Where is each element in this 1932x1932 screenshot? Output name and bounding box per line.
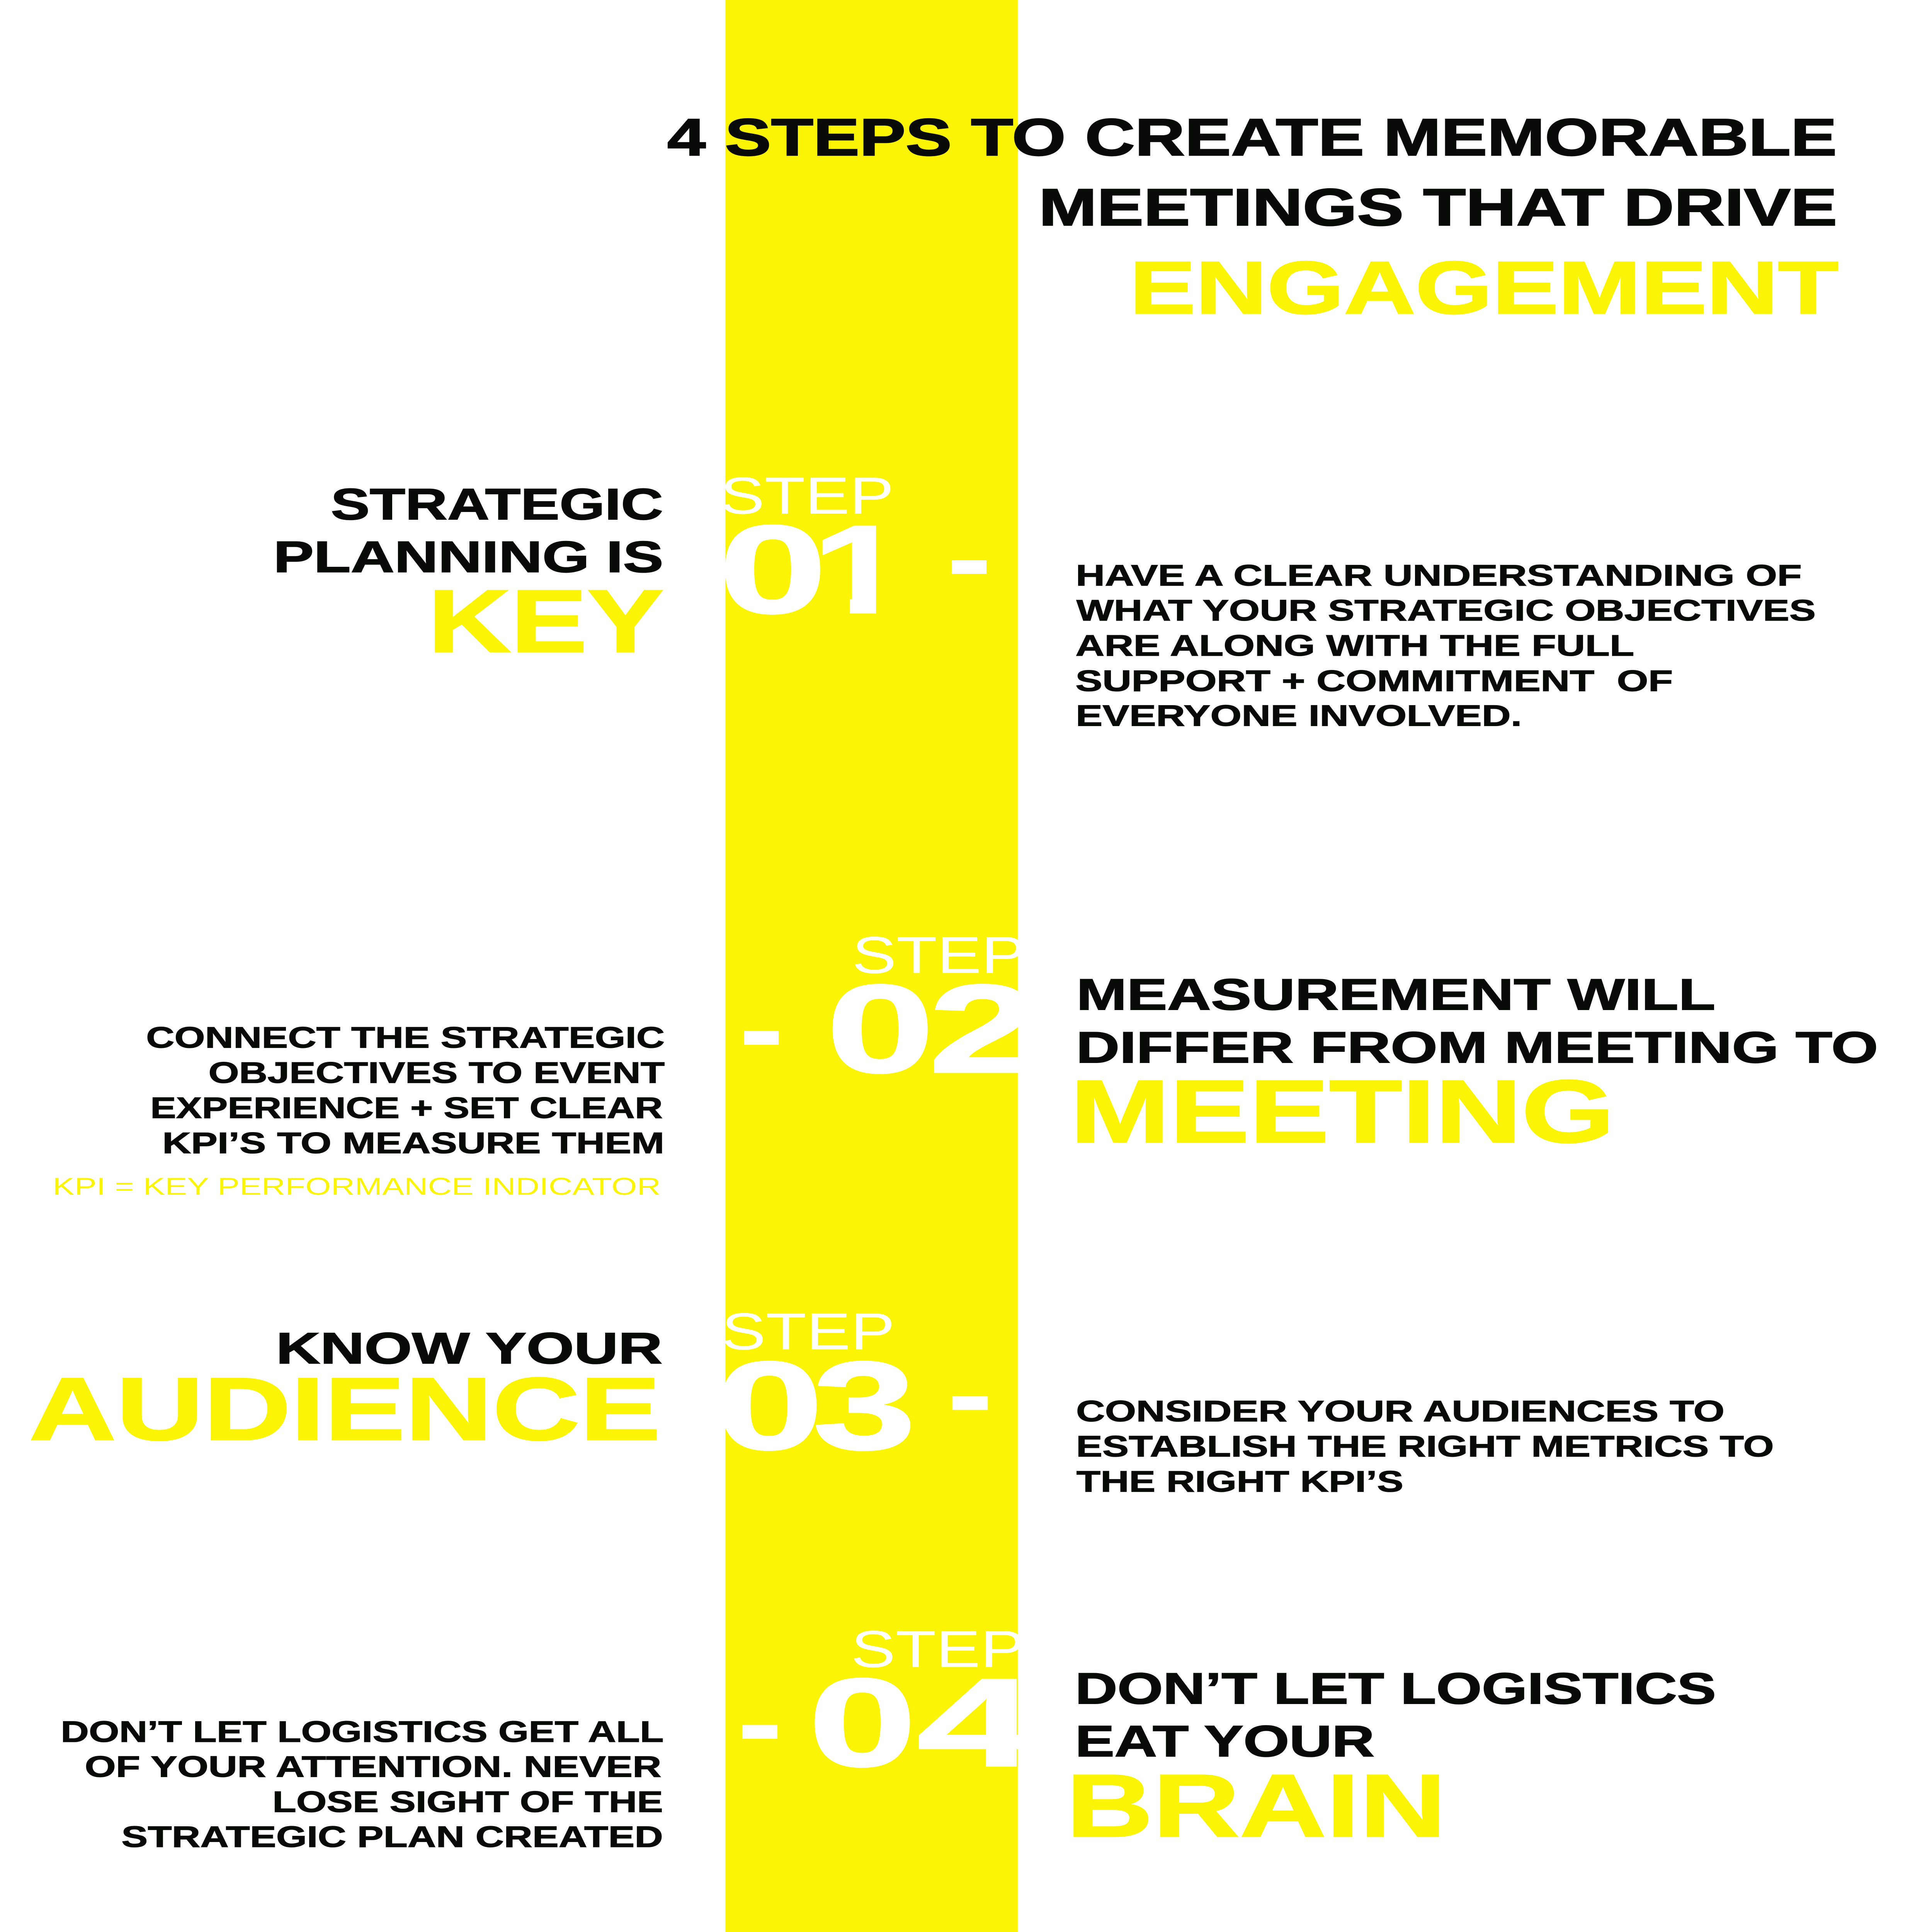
heading line 1: STRATEGIC — [331, 480, 663, 529]
text block: step 2 description: EXPERIENCE + SET CLEAR — [150, 1091, 663, 1124]
text block: step 3 description: CONSIDER YOUR AUDIENCES TO — [1076, 1395, 1725, 1428]
number 04: 4 — [917, 1652, 1037, 1793]
heading line 2: PLANNING IS — [274, 532, 663, 582]
dash — [742, 1725, 777, 1739]
panel: step 2 heading — [1070, 970, 1878, 1161]
text block: step 4 description: STRATEGIC PLAN CREATED — [121, 1820, 663, 1853]
step 4 marker — [742, 1620, 1037, 1793]
text block: step 1 description — [1075, 559, 1816, 732]
step label: STEP — [720, 467, 894, 525]
number 03: 3 — [813, 1335, 916, 1476]
number 02: 2 — [929, 959, 1037, 1099]
text block: step 3 description: ESTABLISH THE RIGHT METRICS TO — [1076, 1429, 1774, 1463]
number 04: 0 — [808, 1652, 917, 1793]
text block: step 1 description: HAVE A CLEAR UNDERSTANDING OF — [1076, 559, 1802, 592]
highlight word: BRAIN — [1066, 1756, 1446, 1855]
dash — [952, 1396, 988, 1410]
step 3 marker — [715, 1303, 988, 1476]
text block: step 1 description: WHAT YOUR STRATEGIC OBJECTIVES — [1077, 594, 1816, 627]
step label: STEP — [852, 926, 1026, 985]
number 03: 0 — [715, 1335, 823, 1476]
panel: step 4 heading — [1066, 1664, 1716, 1855]
heading line 1: MEASUREMENT WILL — [1077, 970, 1715, 1019]
number 01: 1 — [811, 499, 910, 639]
text block: step 1 description: EVERYONE INVOLVED. — [1076, 699, 1522, 732]
heading line 2: DIFFER FROM MEETING TO — [1076, 1023, 1878, 1072]
highlight word: KEY — [428, 571, 664, 671]
heading line 1: DON’T LET LOGISTICS — [1075, 1664, 1716, 1713]
text block: step 2 description: CONNECT THE STRATEGIC — [146, 1021, 665, 1054]
yellow vertical band — [725, 0, 1018, 1932]
text block: step 3 description: THE RIGHT KPI’S — [1077, 1464, 1403, 1498]
text block: step 2 description: KPI’S TO MEASURE THEM — [162, 1126, 664, 1160]
step label: STEP — [851, 1620, 1025, 1679]
text block: step 4 description — [61, 1715, 664, 1853]
text block: step 4 description: DON’T LET LOGISTICS GET ALL — [61, 1715, 664, 1748]
KPI definition note: KPI = KEY PERFORMANCE INDICATOR — [53, 1173, 661, 1200]
text block: step 4 description: LOSE SIGHT OF THE — [272, 1785, 663, 1818]
panel: step 1 heading — [274, 480, 664, 671]
text block: step 2 description: OBJECTIVES TO EVENT — [208, 1056, 665, 1089]
number 02: 0 — [826, 959, 934, 1099]
title line 2: MEETINGS THAT DRIVE — [1039, 178, 1837, 237]
heading line: KNOW YOUR — [276, 1324, 662, 1373]
title — [667, 108, 1838, 330]
dash — [744, 1031, 779, 1045]
highlight word: MEETING — [1070, 1062, 1614, 1161]
step 1 marker — [719, 467, 986, 639]
number 01: 0 — [719, 499, 827, 639]
number 01 — [725, 524, 876, 615]
step 2 marker — [744, 926, 1037, 1099]
title highlight word: ENGAGEMENT — [1130, 246, 1838, 330]
dash — [952, 560, 986, 574]
step label: STEP — [721, 1303, 895, 1361]
highlight word: AUDIENCE — [29, 1359, 660, 1459]
text block: step 1 description: ARE ALONG WITH THE FULL — [1075, 629, 1634, 662]
text block: step 1 description: SUPPORT + COMMITMENT OF — [1075, 664, 1673, 697]
heading line 2: EAT YOUR — [1075, 1717, 1374, 1766]
text block: step 3 description — [1076, 1395, 1774, 1498]
text block: step 2 description — [146, 1021, 665, 1160]
panel: step 3 heading — [29, 1324, 662, 1459]
text block: step 4 description: OF YOUR ATTENTION. NEVER — [85, 1750, 662, 1783]
title line 1: 4 STEPS TO CREATE MEMORABLE — [667, 108, 1837, 167]
